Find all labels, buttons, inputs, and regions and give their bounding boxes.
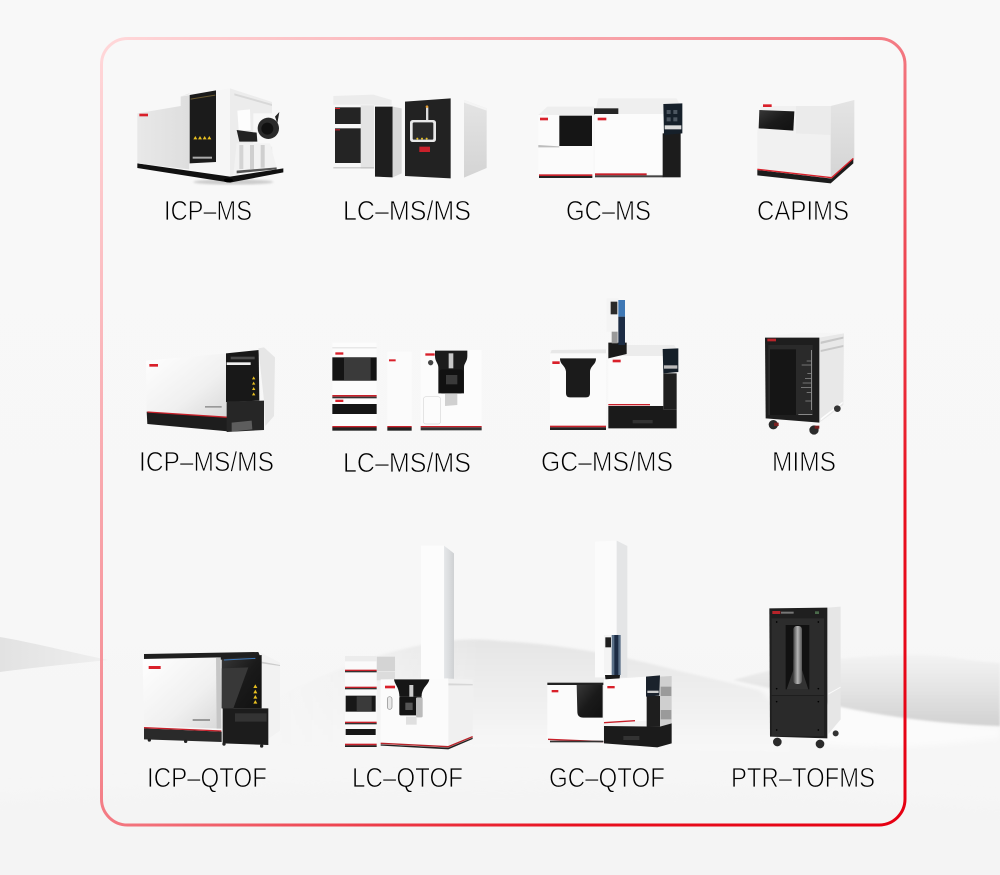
panel border bbox=[102, 38, 905, 825]
icon: LC-MS/MS instrument bbox=[333, 95, 487, 179]
label: GC-QTOF: GC–QTOF bbox=[549, 762, 665, 793]
instrument: LC-QTOF bbox=[345, 546, 473, 793]
label: CAPIMS: CAPIMS bbox=[757, 195, 849, 226]
label: LC-QTOF: LC–QTOF bbox=[352, 762, 463, 793]
label: ICP-MS: ICP–MS bbox=[164, 195, 252, 226]
label: ICP-MS/MS: ICP–MS/MS bbox=[139, 446, 274, 477]
label: ICP-QTOF: ICP–QTOF bbox=[147, 762, 267, 793]
icon: PTR-TOFMS instrument bbox=[769, 607, 841, 748]
instrument: ICP-QTOF bbox=[143, 652, 280, 793]
instrument: GC-MS bbox=[538, 98, 682, 226]
label: LC-MS/MS: LC–MS/MS bbox=[343, 447, 471, 478]
instrument: GC-MS/MS bbox=[541, 298, 678, 477]
label: MIMS: MIMS bbox=[772, 446, 836, 477]
background with soft waves bbox=[0, 637, 1000, 726]
label: LC-MS/MS: LC–MS/MS bbox=[343, 195, 471, 226]
icon: GC-MS/MS instrument bbox=[550, 298, 678, 430]
icon: LC-MS/MS instrument bbox=[332, 343, 482, 431]
instrument: LC-MS/MS (top row) bbox=[333, 95, 487, 226]
icon: ICP-MS/MS instrument bbox=[146, 347, 275, 432]
icon: ICP-MS instrument bbox=[137, 88, 283, 185]
icon: GC-QTOF instrument bbox=[547, 541, 672, 747]
icon: GC-MS instrument bbox=[538, 98, 682, 178]
instrument: LC-MS/MS (middle row) bbox=[332, 343, 482, 478]
icon: LC-QTOF instrument bbox=[345, 546, 473, 749]
label: PTR-TOFMS: PTR–TOFMS bbox=[731, 762, 875, 793]
instrument: GC-QTOF bbox=[547, 541, 672, 793]
icon: ICP-QTOF instrument bbox=[143, 652, 280, 748]
label: GC-MS: GC–MS bbox=[566, 195, 651, 226]
icon: MIMS instrument bbox=[765, 333, 844, 435]
instrument: PTR-TOFMS bbox=[731, 607, 875, 793]
instrument: MIMS bbox=[765, 333, 844, 477]
instrument: ICP-MS bbox=[137, 88, 283, 226]
instrument: ICP-MS/MS bbox=[139, 347, 275, 477]
label: GC-MS/MS: GC–MS/MS bbox=[541, 446, 673, 477]
icon: CAPIMS instrument bbox=[757, 99, 854, 183]
instrument: CAPIMS bbox=[757, 99, 854, 226]
